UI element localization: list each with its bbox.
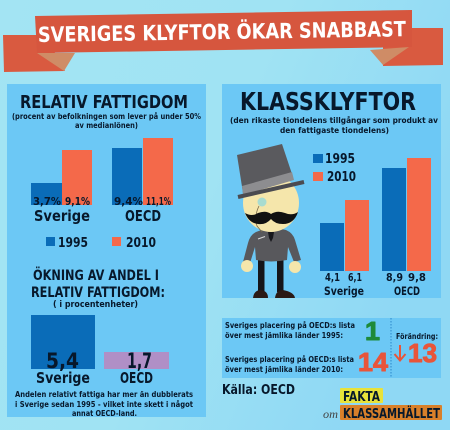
bar chart: relativ fattigdom: 9,1% xyxy=(65,195,90,208)
text block: placering 1995 xyxy=(225,321,355,340)
text block: placering 1995: Sveriges placering på OECD:s lista xyxy=(225,321,355,330)
bar chart: relativ fattigdom: Sverige xyxy=(34,207,90,225)
legend: relativ fattigdom: 1995 xyxy=(58,236,88,251)
subheading: relativ fattigdom: (procent av befolkningen som lever på under 50% xyxy=(12,112,201,121)
text block: andelen relativt fattiga: Andelen relativt fattiga har mer än dubblerats xyxy=(15,390,193,399)
legend: relativ fattigdom: 2010 xyxy=(126,236,156,251)
heading: relativ fattigdom: RELATIV FATTIGDOM xyxy=(20,92,188,113)
label: förändring: Förändring: xyxy=(396,332,438,341)
heading: ökning av andel: RELATIV FATTIGDOM: xyxy=(31,285,165,301)
panel: klassklyftor xyxy=(222,84,441,298)
subheading: relativ fattigdom xyxy=(12,112,201,130)
icon: man with top hat and moustache xyxy=(237,144,304,298)
panel: placering på OECD:s lista xyxy=(222,316,441,378)
title banner xyxy=(3,10,443,72)
bar chart: ökning: Sverige xyxy=(36,369,90,387)
heading: ökning av andel: ( i procentenheter) xyxy=(53,300,138,310)
source: Källa: OECD xyxy=(222,383,295,398)
heading: klassklyftor: KLASSKLYFTOR xyxy=(240,87,416,116)
subheading: klassklyftor: (den rikaste tiondelens tillgångar som produkt av xyxy=(230,115,439,125)
bar chart: ökning xyxy=(31,315,169,387)
heading: ökning av andel xyxy=(31,266,165,310)
subheading: klassklyftor: den fattigaste tiondelens) xyxy=(280,126,389,135)
text block: placering 2010: över mest jämlika länder 2010: xyxy=(225,365,343,374)
text block: andelen relativt fattiga xyxy=(15,390,193,418)
legend: relativ fattigdom xyxy=(46,236,156,251)
number: change down 13: 13 xyxy=(408,338,437,368)
legend: klassklyftor: 2010 xyxy=(327,170,356,185)
bar chart: relativ fattigdom: 3,7% xyxy=(33,195,61,208)
bar chart: klassklyftor: 9,8 xyxy=(408,271,426,284)
bar chart: relativ fattigdom: OECD xyxy=(125,207,161,225)
bar chart: klassklyftor: 8,9 xyxy=(386,271,403,284)
bar chart: klassklyftor: 4,1 xyxy=(325,271,340,284)
bar chart: relativ fattigdom: 11,1% xyxy=(146,195,171,208)
number: rank 14: 14 xyxy=(358,347,389,377)
text block: placering 2010 xyxy=(225,355,354,374)
logo: fakta om klassamhället: om xyxy=(323,407,338,421)
logo: fakta om klassamhället: FAKTA xyxy=(343,390,380,405)
text block: placering 2010: Sveriges placering på OECD:s lista xyxy=(225,355,354,364)
logo: fakta om klassamhället xyxy=(323,388,442,422)
number: rank 1: 1 xyxy=(365,316,380,346)
bar chart: klassklyftor xyxy=(320,158,431,298)
number: change down 13 xyxy=(394,338,437,368)
panel: relativ fattigdom xyxy=(7,84,206,418)
bar chart: relativ fattigdom xyxy=(31,138,173,225)
bar chart: klassklyftor: 6,1 xyxy=(348,271,362,284)
heading: ökning av andel: ÖKNING AV ANDEL I xyxy=(33,266,159,284)
bar chart: ökning: 1,7 xyxy=(127,349,152,373)
subheading: klassklyftor xyxy=(230,115,439,135)
bar chart: relativ fattigdom: 9,4% xyxy=(114,195,143,208)
text block: andelen relativt fattiga: i Sverige sedan 1995 - vilket inte skett i något xyxy=(15,399,193,409)
legend: klassklyftor: 1995 xyxy=(325,152,355,167)
legend: klassklyftor xyxy=(313,152,356,185)
bar chart: ökning: 5,4 xyxy=(46,349,79,373)
text block: placering 1995: över mest jämlika länder 1995: xyxy=(225,331,343,340)
subheading: relativ fattigdom: av medianlönen) xyxy=(75,121,138,130)
bar chart: klassklyftor: Sverige xyxy=(324,284,364,298)
bar chart: ökning: OECD xyxy=(120,369,153,387)
bar chart: klassklyftor: OECD xyxy=(394,284,420,298)
text block: andelen relativt fattiga: annat OECD-land. xyxy=(72,409,137,418)
